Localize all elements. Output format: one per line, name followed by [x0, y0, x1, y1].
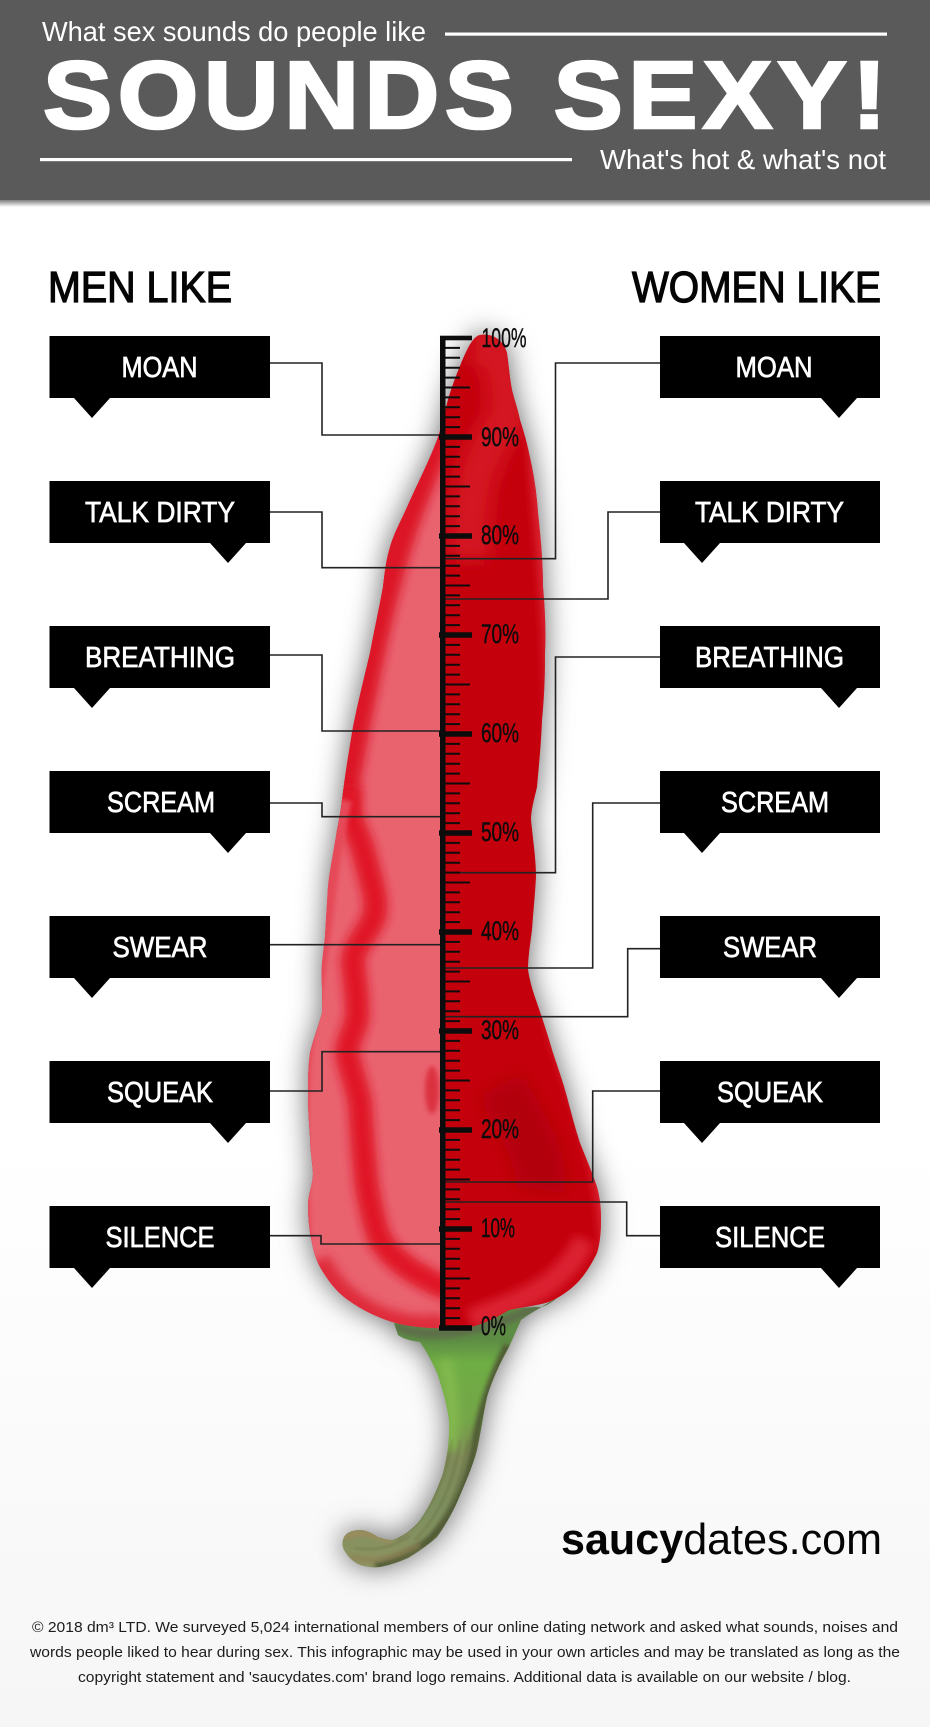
copyright footer: words people liked to hear during sex. This infographic may be used in your own articles and may be translated as long as the	[29, 1645, 900, 1661]
ruler labels: 60%	[481, 718, 519, 748]
label: men breathing: BREATHING	[85, 642, 235, 674]
header tagline: What sex sounds do people like	[42, 16, 426, 47]
label: men talk dirty: TALK DIRTY	[85, 497, 235, 529]
label: women swear	[660, 916, 880, 998]
ruler labels: 40%	[481, 916, 519, 946]
connector: men swear	[270, 944, 441, 946]
label: women scream	[660, 771, 880, 853]
label: women breathing	[660, 626, 880, 708]
label: women talk dirty: TALK DIRTY	[695, 497, 844, 529]
ruler labels: 90%	[481, 422, 519, 452]
label: women silence	[660, 1206, 880, 1288]
copyright footer: © 2018 dm³ LTD. We surveyed 5,024 international members of our online dating network and asked what sounds, noises and	[32, 1620, 898, 1636]
label: men scream	[50, 771, 270, 853]
ruler labels: 20%	[481, 1114, 519, 1144]
chilli body	[290, 320, 620, 1340]
label: men scream: SCREAM	[107, 787, 215, 819]
label: men moan: MOAN	[122, 352, 198, 384]
connector: women swear	[445, 949, 660, 1017]
ruler labels: 100%	[482, 323, 526, 353]
connector: women talk dirty	[445, 512, 660, 599]
label: women silence: SILENCE	[715, 1222, 825, 1254]
label: women moan	[660, 336, 880, 418]
ruler labels: 70%	[481, 619, 519, 649]
connector: women silence	[445, 1202, 660, 1236]
label: men squeak: SQUEAK	[107, 1077, 214, 1109]
header subtitle: What's hot & what's not	[600, 144, 886, 175]
chilli stem	[342, 1298, 557, 1567]
chilli pepper illustration	[290, 320, 620, 1567]
connector: men moan	[270, 363, 441, 435]
connector: women breathing	[445, 657, 660, 873]
copyright footer: copyright statement and 'saucydates.com' brand logo remains. Additional data is available on our website / blog.	[78, 1670, 851, 1686]
percentage ruler	[439, 323, 526, 1341]
ruler labels: 80%	[481, 520, 519, 550]
label: women scream: SCREAM	[721, 787, 829, 819]
connector: men squeak	[270, 1052, 441, 1091]
ruler labels: 10%	[481, 1213, 515, 1243]
label: women squeak: SQUEAK	[717, 1077, 824, 1109]
main title: SOUNDS SEXY!	[43, 42, 892, 149]
label: women breathing: BREATHING	[695, 642, 844, 674]
label: women talk dirty	[660, 481, 880, 563]
column heading: women: WOMEN LIKE	[632, 263, 881, 312]
connector: men silence	[270, 1236, 441, 1244]
ruler labels: 30%	[481, 1015, 519, 1045]
label: men breathing	[50, 626, 270, 708]
label: women squeak	[660, 1061, 880, 1143]
connector: women moan	[445, 363, 660, 559]
connector: men talk dirty	[270, 512, 441, 568]
label: women moan: MOAN	[736, 352, 812, 384]
label: men silence	[50, 1206, 270, 1288]
label: men silence: SILENCE	[106, 1222, 214, 1254]
copyright footer	[29, 1620, 900, 1686]
ruler labels: 0%	[481, 1311, 506, 1341]
label: men swear: SWEAR	[112, 932, 208, 964]
connector: men scream	[270, 803, 441, 817]
label: men squeak	[50, 1061, 270, 1143]
connector: men breathing	[270, 655, 441, 731]
connector: women squeak	[445, 1091, 660, 1182]
label: men moan	[50, 336, 270, 418]
ruler labels: 50%	[481, 817, 519, 847]
label: men talk dirty	[50, 481, 270, 563]
label: men swear	[50, 916, 270, 998]
connector: women scream	[445, 803, 660, 968]
ruler labels	[481, 323, 526, 1341]
brand logo: saucydates.com	[561, 1516, 882, 1564]
label: women swear: SWEAR	[723, 932, 817, 964]
header banner	[0, 0, 930, 207]
column heading: men: MEN LIKE	[48, 263, 232, 312]
